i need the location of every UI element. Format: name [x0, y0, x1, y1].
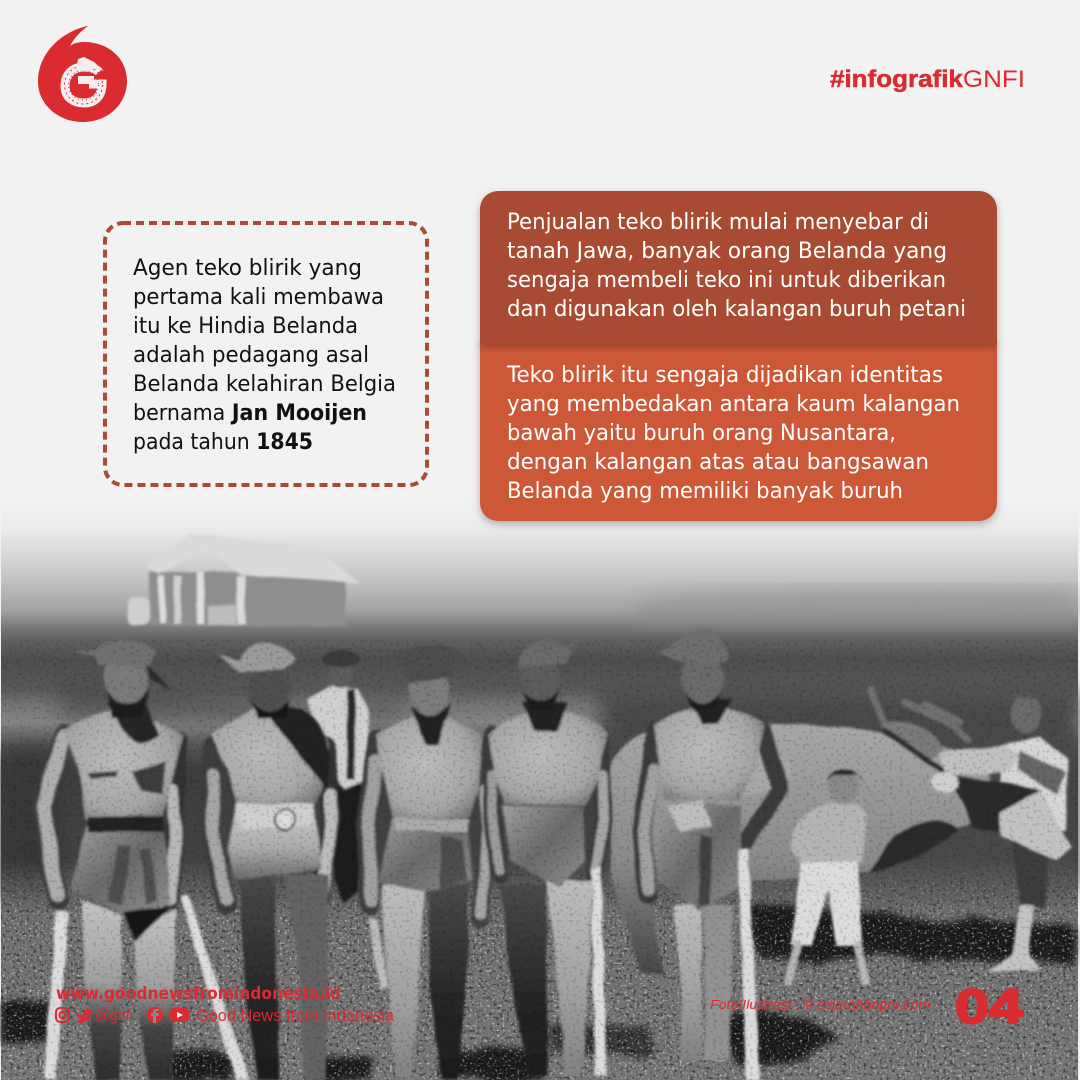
page number: 04 — [955, 981, 1023, 1034]
text: identity explanation — [506, 363, 960, 504]
text: agent of the teapot: adalah pedagang asal — [133, 343, 369, 368]
panel: upper dark red sales text — [480, 191, 997, 344]
panel: lower red identity text — [480, 340, 997, 521]
hashtag header: #infografik GNFI — [830, 66, 1025, 93]
text: identity explanation: dengan kalangan atas atau bangsawan — [507, 450, 929, 475]
text: spread of sales: sengaja membeli teko ini untuk diberikan — [507, 268, 946, 293]
photo: rear farmer in white shirt — [307, 650, 369, 905]
text: identity explanation: bawah yaitu buruh orang Nusantara, — [507, 421, 896, 446]
logo: GNFI red swirl with garuda G — [38, 26, 127, 122]
text: spread of sales: tanah Jawa, banyak orang Belanda yang — [507, 239, 947, 264]
text: agent of the teapot: bernama Jan Mooijen — [133, 401, 367, 426]
text: agent of the teapot: pertama kali membawa — [133, 285, 384, 310]
photo: farmer 5 — [642, 628, 780, 1060]
photo: farmer 1 — [41, 640, 183, 1080]
photo: wooden sticks — [44, 848, 760, 1080]
icon: youtube — [170, 1008, 189, 1022]
text: identity explanation: Belanda yang memiliki banyak buruh — [507, 479, 903, 504]
text: spread of sales: dan digunakan oleh kalangan buruh petani — [507, 297, 966, 322]
handle: @gnfi — [95, 1007, 133, 1024]
footer: website and social handles — [56, 984, 395, 1025]
icon: instagram — [56, 1008, 69, 1022]
page name: Good News from Indonesia — [196, 1006, 395, 1025]
photo: farmer 3 — [366, 646, 488, 1080]
text: identity explanation: Teko blirik itu sengaja dijadikan identitas — [506, 363, 943, 388]
photo credit: Foto/Ilustrasi : © sejarahbogor.com — [710, 997, 930, 1012]
icon: facebook — [147, 1007, 163, 1023]
photo: farmer 2 — [210, 643, 331, 1080]
photo: house in the distance — [128, 534, 362, 626]
photo: Javanese farm labourers with buffalo — [0, 500, 1078, 1080]
photo: child in front of buffalo — [788, 769, 868, 982]
text: agent of the teapot: pada tahun 1845 — [133, 430, 313, 455]
text: identity explanation: yang membedakan antara kaum kalangan — [507, 392, 960, 417]
text: spread of sales: Penjualan teko blirik mulai menyebar di — [507, 210, 929, 235]
photo: buffalo head and muzzle — [931, 772, 1071, 860]
text: agent of the teapot — [133, 256, 396, 455]
text: agent of the teapot: itu ke Hindia Belanda — [133, 314, 358, 339]
photo backdrop: misty hills — [0, 500, 1078, 920]
photo: buffalo — [609, 689, 1000, 975]
text: agent of the teapot: Belanda kelahiran Belgia — [133, 372, 396, 397]
text: agent of the teapot: Agen teko blirik yang — [133, 256, 362, 281]
text: spread of sales — [507, 210, 966, 322]
photo: film grain — [1, 640, 1078, 1080]
photo: boy holding buffalo — [940, 693, 1068, 972]
website url: www.goodnewsfromindonesia.id — [56, 984, 341, 1004]
panel: Jan Mooijen dashed note — [105, 223, 427, 485]
icon: twitter — [75, 1009, 92, 1023]
photo: farmer 4 — [488, 636, 607, 1075]
photo: ground — [1, 860, 1078, 1080]
